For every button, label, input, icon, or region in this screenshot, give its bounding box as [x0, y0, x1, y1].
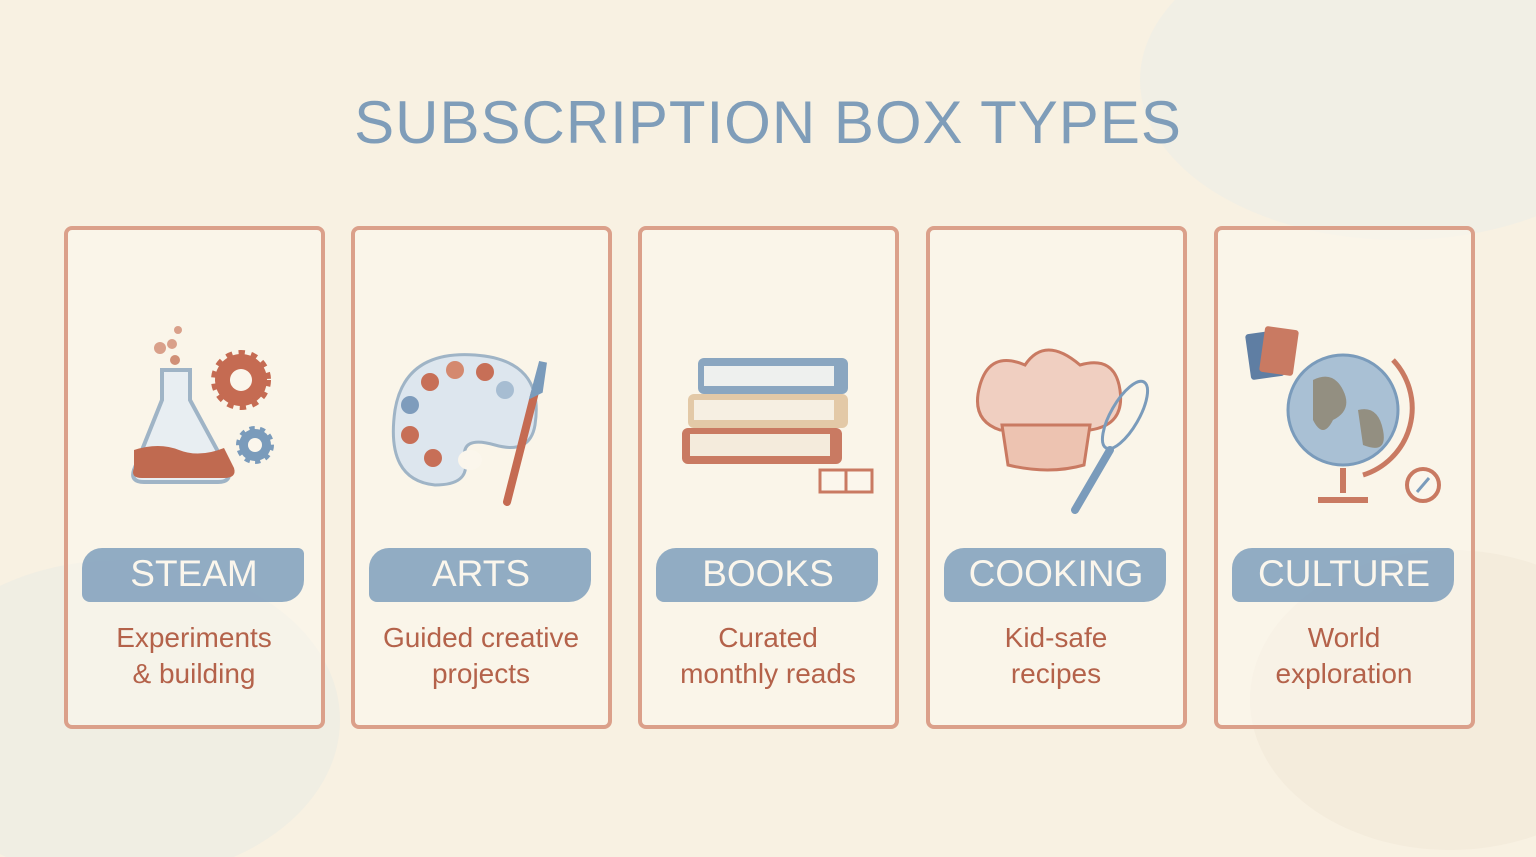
- description: [1005, 622, 1107, 689]
- label: COOKING: [969, 553, 1143, 594]
- icon: chef hat and whisk: [976, 348, 1150, 514]
- panel: cooking: [926, 226, 1187, 729]
- description: exploration: [1276, 658, 1412, 689]
- description: [116, 622, 272, 689]
- description: Curated: [718, 622, 818, 653]
- label: ARTS: [432, 553, 530, 594]
- description: Kid-safe: [1005, 622, 1107, 653]
- description: Experiments: [116, 622, 272, 653]
- icon: globe, passport, compass: [1245, 326, 1441, 503]
- description: [383, 622, 579, 689]
- label banner: [656, 548, 878, 602]
- label banner: [944, 548, 1166, 602]
- title: SUBSCRIPTION BOX TYPES: [354, 89, 1182, 156]
- icon: book stack: [682, 358, 874, 494]
- panel: steam: [64, 226, 325, 729]
- description: [1276, 622, 1412, 689]
- description: World: [1308, 622, 1380, 653]
- label: CULTURE: [1258, 553, 1430, 594]
- icon: flask and gears: [131, 326, 274, 484]
- panel: books: [638, 226, 899, 729]
- description: Guided creative: [383, 622, 579, 653]
- label banner: [369, 548, 591, 602]
- description: & building: [132, 658, 255, 689]
- panel: culture: [1214, 226, 1475, 729]
- description: [680, 622, 856, 689]
- panel: arts: [351, 226, 612, 729]
- label banner: [1232, 548, 1454, 602]
- icon: palette and brush: [392, 353, 547, 506]
- description: monthly reads: [680, 658, 856, 689]
- label banner: [82, 548, 304, 602]
- label: STEAM: [130, 553, 258, 594]
- description: recipes: [1011, 658, 1101, 689]
- label: BOOKS: [702, 553, 834, 594]
- description: projects: [432, 658, 530, 689]
